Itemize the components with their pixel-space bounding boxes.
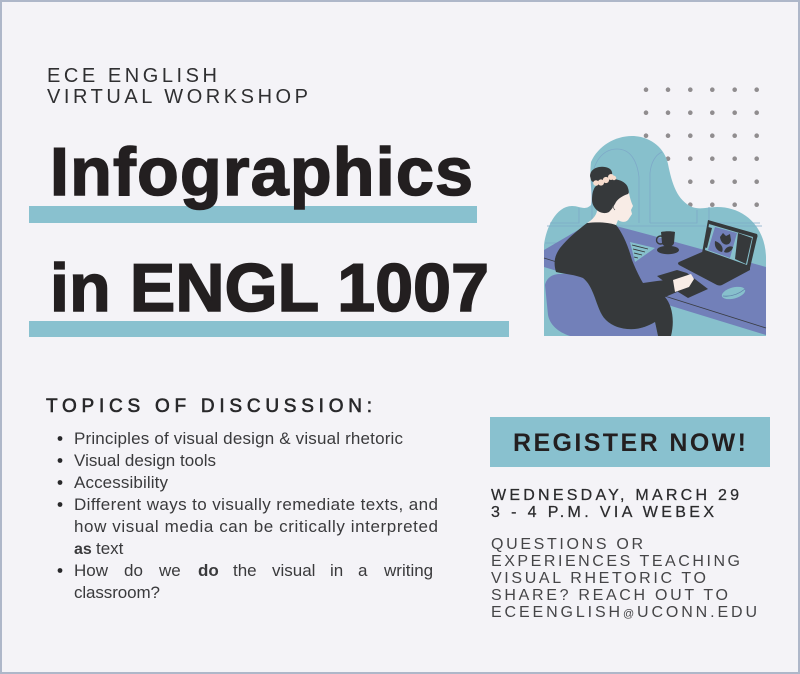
table edge line — [544, 258, 766, 328]
hair bun and scrunchie — [590, 167, 616, 186]
illustration background blob — [544, 136, 766, 336]
table — [544, 226, 766, 335]
topics list: visual — [272, 561, 315, 580]
heading: ECE English virtual workshop: ECE ENGLISH — [47, 65, 217, 87]
title — [50, 134, 489, 326]
topics list: we — [158, 561, 181, 580]
dot grid — [644, 87, 759, 207]
event date and time — [491, 487, 739, 521]
contact note: EXPERIENCES TEACHING — [491, 553, 740, 570]
topics list: how visual media can be critically interpreted — [74, 517, 438, 536]
topics list: Visual design tools — [74, 451, 216, 470]
chair — [545, 274, 658, 336]
topics list: Principles of visual design & visual rhetoric — [74, 429, 404, 448]
topics list: Different ways to visually remediate texts, and — [74, 495, 438, 514]
title underline bars — [29, 206, 509, 337]
laptop — [678, 220, 758, 286]
topics list: How — [74, 561, 109, 580]
topics list: classroom? — [74, 583, 160, 602]
contact note — [491, 536, 757, 621]
coffee mug — [656, 231, 679, 254]
contact note: QUESTIONS OR — [491, 536, 643, 553]
topics list: a — [358, 561, 368, 580]
topics list: the — [233, 561, 257, 580]
bullet markers — [58, 436, 62, 573]
hand — [673, 274, 694, 292]
head and face — [587, 179, 633, 225]
topics list: text — [96, 539, 124, 558]
contact note: ECEENGLISH @UCONN.EDU — [491, 604, 757, 621]
mouse — [720, 285, 747, 301]
heading: ECE English virtual workshop: VIRTUAL WORKSHOP — [47, 86, 308, 108]
window outlines — [545, 149, 762, 243]
contact note: SHARE? REACH OUT TO — [491, 587, 728, 604]
topics list: writing — [383, 561, 433, 580]
contact note: VISUAL RHETORIC TO — [491, 570, 706, 587]
drawing tablet — [657, 270, 708, 298]
illustration: woman working at laptop — [544, 136, 766, 336]
register now button — [490, 417, 770, 467]
heading: topics of discussion: TOPICS OF DISCUSSION: — [46, 396, 372, 417]
register now button: REGISTER NOW! — [513, 429, 746, 457]
topics list: do — [124, 561, 143, 580]
paper on table — [630, 242, 655, 262]
tulip on screen — [715, 233, 733, 253]
topics list: in — [330, 561, 343, 580]
topics list: do — [198, 561, 219, 580]
title: in ENGL 1007 — [50, 250, 489, 326]
topics list: Accessibility — [74, 473, 168, 492]
heading: ECE English virtual workshop — [47, 65, 308, 108]
topics list — [58, 429, 438, 602]
title: Infographics — [50, 134, 473, 210]
person body — [555, 222, 677, 336]
event date and time: 3 - 4 P.M. VIA WEBEX — [491, 504, 714, 521]
event date and time: WEDNESDAY, MARCH 29 — [491, 487, 739, 504]
topics list: as — [74, 541, 92, 558]
